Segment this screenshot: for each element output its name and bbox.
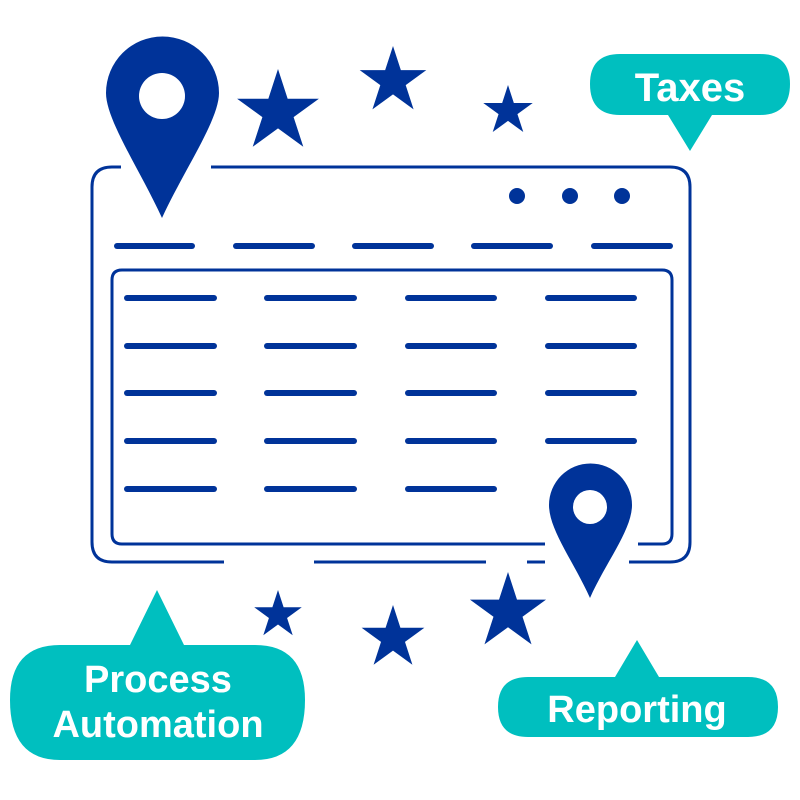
stars top <box>237 46 533 147</box>
callout: Reporting: Reporting <box>547 689 727 731</box>
callout: Taxes <box>590 54 790 151</box>
callout: Reporting <box>498 640 778 737</box>
table inner frame <box>112 270 672 544</box>
callout: Process Automation <box>10 590 305 760</box>
browser window outer frame <box>92 167 690 562</box>
table rows <box>127 298 634 489</box>
header tabs lines <box>117 243 670 249</box>
icon: location pin top-left <box>106 36 219 218</box>
callout: Process Automation: Automation <box>52 704 264 746</box>
window dots <box>509 188 630 204</box>
callout: Process Automation: Process <box>84 659 232 701</box>
stars bottom <box>254 572 546 665</box>
icon: location pin bottom-right <box>549 464 632 598</box>
callout: Taxes: Taxes <box>635 66 745 110</box>
